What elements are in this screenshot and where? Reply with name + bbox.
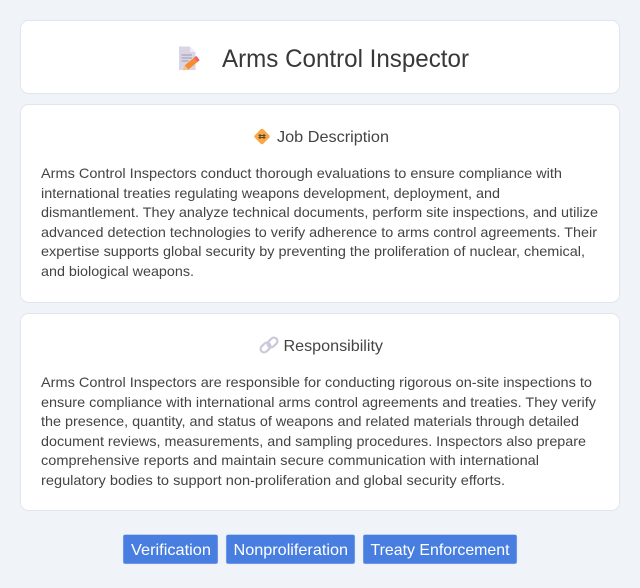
tags row xyxy=(123,534,517,564)
panel: responsibility xyxy=(20,314,620,510)
text block: job description: expertise supports global security by preventing the proliferation of nuclear, chemical, xyxy=(41,243,585,259)
text block: responsibility: Arms Control Inspectors are responsible for conducting rigorous on-site inspections to xyxy=(41,374,592,390)
text block: job description xyxy=(41,165,598,279)
icon: orange diamond sign xyxy=(254,128,270,145)
text block: job description: dismantlement. They analyze technical documents, perform site inspections, and utilize xyxy=(41,204,598,220)
text block: responsibility xyxy=(41,374,596,488)
text block: job description: and biological weapons. xyxy=(41,263,194,279)
icon: chain link xyxy=(259,336,279,354)
tag: verification xyxy=(123,534,218,564)
text block: responsibility: comprehensive reports and maintain secure communication with international xyxy=(41,452,539,468)
text block: responsibility: ensure compliance with international arms control agreements and treaties. They verify xyxy=(41,394,596,410)
tag: nonproliferation xyxy=(226,534,355,564)
heading: job description: Job Description xyxy=(277,129,389,146)
text block: responsibility: document reviews, measurements, and sampling procedures. Inspectors also prepare xyxy=(41,433,586,449)
icon: document with pencil xyxy=(179,46,198,70)
text block: responsibility: regulatory bodies to support non-proliferation and global security efforts. xyxy=(41,472,505,488)
text block: job description: advanced detection technologies to verify adherence to arms control agreements. Their xyxy=(41,224,597,240)
tag: treaty enforcement: Treaty Enforcement xyxy=(370,542,510,559)
panel: title header xyxy=(20,20,620,94)
title: Arms Control Inspector xyxy=(222,45,469,73)
tag: verification: Verification xyxy=(131,542,211,559)
panel: job description xyxy=(20,104,620,302)
tag: treaty enforcement xyxy=(363,534,517,564)
text block: job description: international treaties regulating weapons development, deployment, and xyxy=(41,185,500,201)
text block: job description: Arms Control Inspectors conduct thorough evaluations to ensure compliance with xyxy=(41,165,562,181)
text block: responsibility: the presence, quantity, and status of weapons and related materials through detailed xyxy=(41,413,579,429)
tag: nonproliferation: Nonproliferation xyxy=(234,542,348,559)
heading: responsibility: Responsibility xyxy=(284,338,383,355)
